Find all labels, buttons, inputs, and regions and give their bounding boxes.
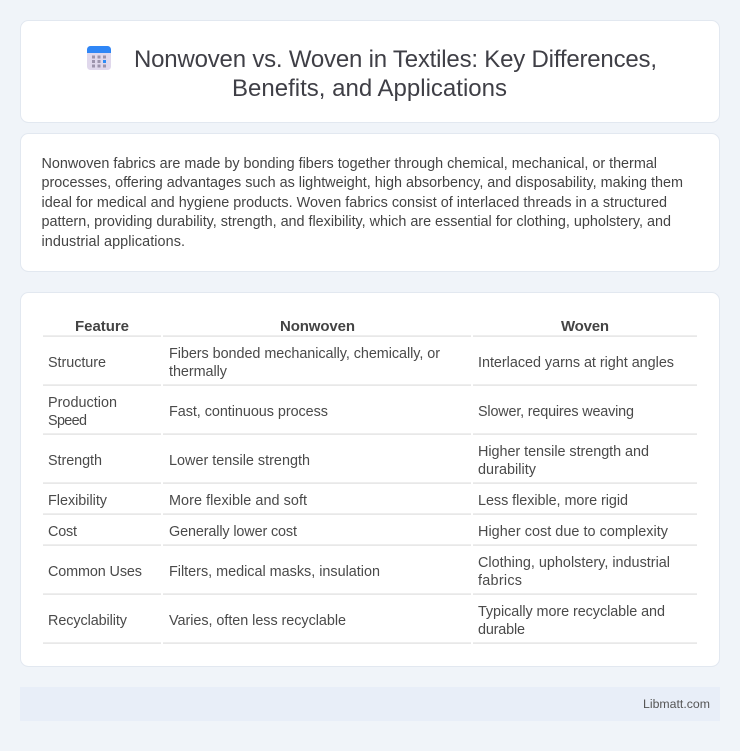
text block: introduction paragraph: pattern, providing durability, strength, and flexibility, which are essential for clothing, upholstery, and — [42, 214, 671, 230]
row: strength: Higher tensile strength and — [478, 444, 649, 460]
row: common uses: Clothing, upholstery, industrial — [478, 555, 670, 571]
table header row: Woven — [561, 318, 609, 335]
text block: introduction paragraph: ideal for medical and hygiene products. Woven fabrics consist of interlaced threads in a structured — [42, 195, 667, 211]
row: common uses — [48, 555, 670, 589]
row: strength: Lower tensile strength — [169, 453, 310, 469]
row: recyclability: Recyclability — [48, 613, 128, 629]
table header row: Nonwoven — [280, 318, 355, 335]
text block: introduction paragraph: industrial applications. — [42, 234, 185, 250]
row: cost: Cost — [48, 524, 77, 540]
row: recyclability: Typically more recyclable and — [478, 604, 665, 620]
row: production speed: Slower, requires weaving — [478, 404, 634, 420]
row: structure — [48, 346, 674, 380]
footer — [20, 687, 720, 721]
table header row — [75, 318, 609, 335]
panel: comparison table — [20, 292, 720, 666]
text block: introduction paragraph: processes, offering advantages such as lightweight, high absorbency, and disposability, making them — [42, 175, 683, 191]
row: production speed — [48, 395, 634, 429]
row: structure: thermally — [169, 364, 228, 380]
table header row: Feature — [75, 318, 129, 335]
row: production speed: Production — [48, 395, 117, 411]
row: cost: Higher cost due to complexity — [478, 524, 669, 540]
row: strength: Strength — [48, 453, 102, 469]
row: recyclability: durable — [478, 622, 525, 638]
row: strength — [48, 444, 649, 478]
panel: introduction — [20, 134, 720, 272]
row: common uses: Common Uses — [48, 564, 142, 580]
text block: introduction paragraph — [42, 156, 683, 250]
row: cost — [48, 524, 669, 540]
row: flexibility: Less flexible, more rigid — [478, 493, 628, 509]
row: production speed: Speed — [48, 413, 87, 429]
row: common uses: Filters, medical masks, insulation — [169, 564, 380, 580]
row: recyclability: Varies, often less recyclable — [169, 613, 346, 629]
row: common uses: fabrics — [478, 573, 522, 589]
row: structure: Fibers bonded mechanically, chemically, or — [169, 346, 440, 362]
title: Benefits, and Applications — [232, 75, 507, 102]
row: structure: Structure — [48, 355, 106, 371]
icon: calendar — [87, 46, 111, 70]
row: cost: Generally lower cost — [169, 524, 297, 540]
panel: title card — [20, 20, 720, 122]
row: structure: Interlaced yarns at right angles — [478, 355, 674, 371]
title — [134, 46, 657, 102]
footer credit: Libmatt.com — [643, 697, 710, 711]
row: production speed: Fast, continuous process — [169, 404, 328, 420]
text block: introduction paragraph: Nonwoven fabrics are made by bonding fibers together through chemical, mechanical, or thermal — [42, 156, 657, 172]
row: strength: durability — [478, 462, 537, 478]
row: flexibility: Flexibility — [48, 493, 108, 509]
row: flexibility: More flexible and soft — [169, 493, 307, 509]
title: Nonwoven vs. Woven in Textiles: Key Differences, — [134, 46, 657, 73]
row: recyclability — [48, 604, 665, 638]
row: flexibility — [48, 493, 628, 509]
